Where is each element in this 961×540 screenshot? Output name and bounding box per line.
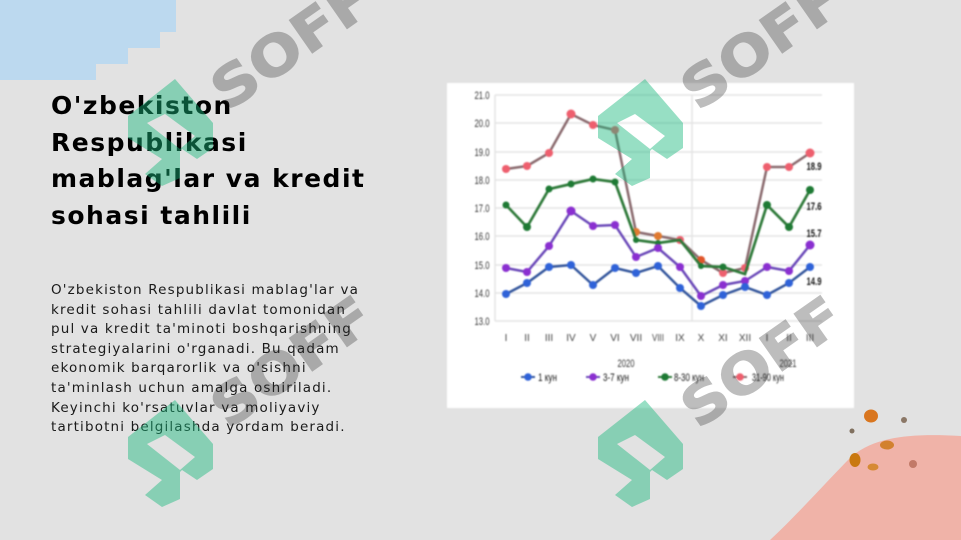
y-axis labels: 14.0 [474,288,490,300]
x-axis labels: XI [718,333,728,344]
year labels: 2021 [780,358,796,370]
title: mablag'lar va kredit [51,164,365,193]
x-axis labels: II [524,333,530,344]
body text: pul va kredit ta'minoti boshqarishning [51,321,352,337]
end-of-line value labels: 18.9 [806,161,822,173]
series: 1 kun (blue) [502,261,814,310]
end-of-line value labels: 15.7 [806,228,822,240]
x-axis labels: IX [675,333,685,344]
legend: 1 кун [538,372,557,384]
logo: bottom-left [128,400,213,507]
x-axis labels: VII [630,333,642,344]
body text: strategiyalarini o'rganadi. Bu qadam [51,341,340,357]
title [51,91,365,230]
panel: line chart [447,83,854,408]
body text: ta'minlash uchun amalga oshiriladi. [51,380,332,396]
x-axis labels: VIII [652,333,664,344]
title: sohasi tahlili [51,201,252,230]
y-axis labels: 15.0 [474,260,490,272]
blob: bottom-right pink [770,435,961,540]
x-axis labels: VI [610,333,620,344]
x-axis labels: XII [739,333,751,344]
x-axis labels: I [766,333,768,344]
grid lines [495,95,822,321]
legend: 31-90 кун [752,372,784,384]
x-axis labels: II [786,333,792,344]
x-axis labels: I [505,333,507,344]
logo: bottom-right [598,400,683,507]
x-axis labels: IV [566,333,576,344]
y-axis labels [474,90,490,328]
body text: Keyinchi ko'rsatuvlar va moliyaviy [51,400,321,416]
series: 8-30 kun (green) [502,176,814,274]
y-axis labels: 13.0 [474,316,490,328]
legend: 8-30 кун [674,372,704,384]
blob: top-left blue [0,0,176,80]
y-axis labels: 18.0 [474,175,490,187]
speckles: orange dots [850,410,917,470]
y-axis labels: 16.0 [474,231,490,243]
y-axis labels: 19.0 [474,147,490,159]
x-axis labels: III [545,333,553,344]
y-axis labels: 21.0 [474,90,490,102]
watermark text: bottom-left: SOFF [199,284,385,440]
end-of-line value labels: 17.6 [806,201,822,213]
year labels [618,358,796,370]
title: Respublikasi [51,128,248,157]
y-axis labels: 20.0 [474,118,490,130]
legend: 3-7 кун [603,372,629,384]
series: 31-90 kun (red) [502,110,814,277]
series: 3-7 kun (purple) [502,206,814,300]
y-axis labels: 17.0 [474,203,490,215]
x-axis labels: V [590,333,597,344]
logo: top-right [598,79,683,186]
title: O'zbekiston [51,91,233,120]
body text: ekonomik barqarorlik va o'sishni [51,360,307,376]
watermark text: bottom-right: SOFF [669,284,855,440]
legend [521,372,784,384]
x-axis labels: X [698,333,705,344]
body text: O'zbekiston Respublikasi mablag'lar va [51,282,359,298]
year labels: 2020 [618,358,634,370]
x-axis labels: III [806,333,814,344]
end-of-line value labels: 14.9 [806,276,822,288]
x-axis labels [505,333,814,344]
body text: tartibotni belgilashda yordam beradi. [51,419,346,435]
end-of-line value labels [806,161,822,288]
body text [51,282,359,435]
body text: kredit sohasi tahlili davlat tomonidan [51,302,346,318]
logo: top-left [128,79,213,186]
